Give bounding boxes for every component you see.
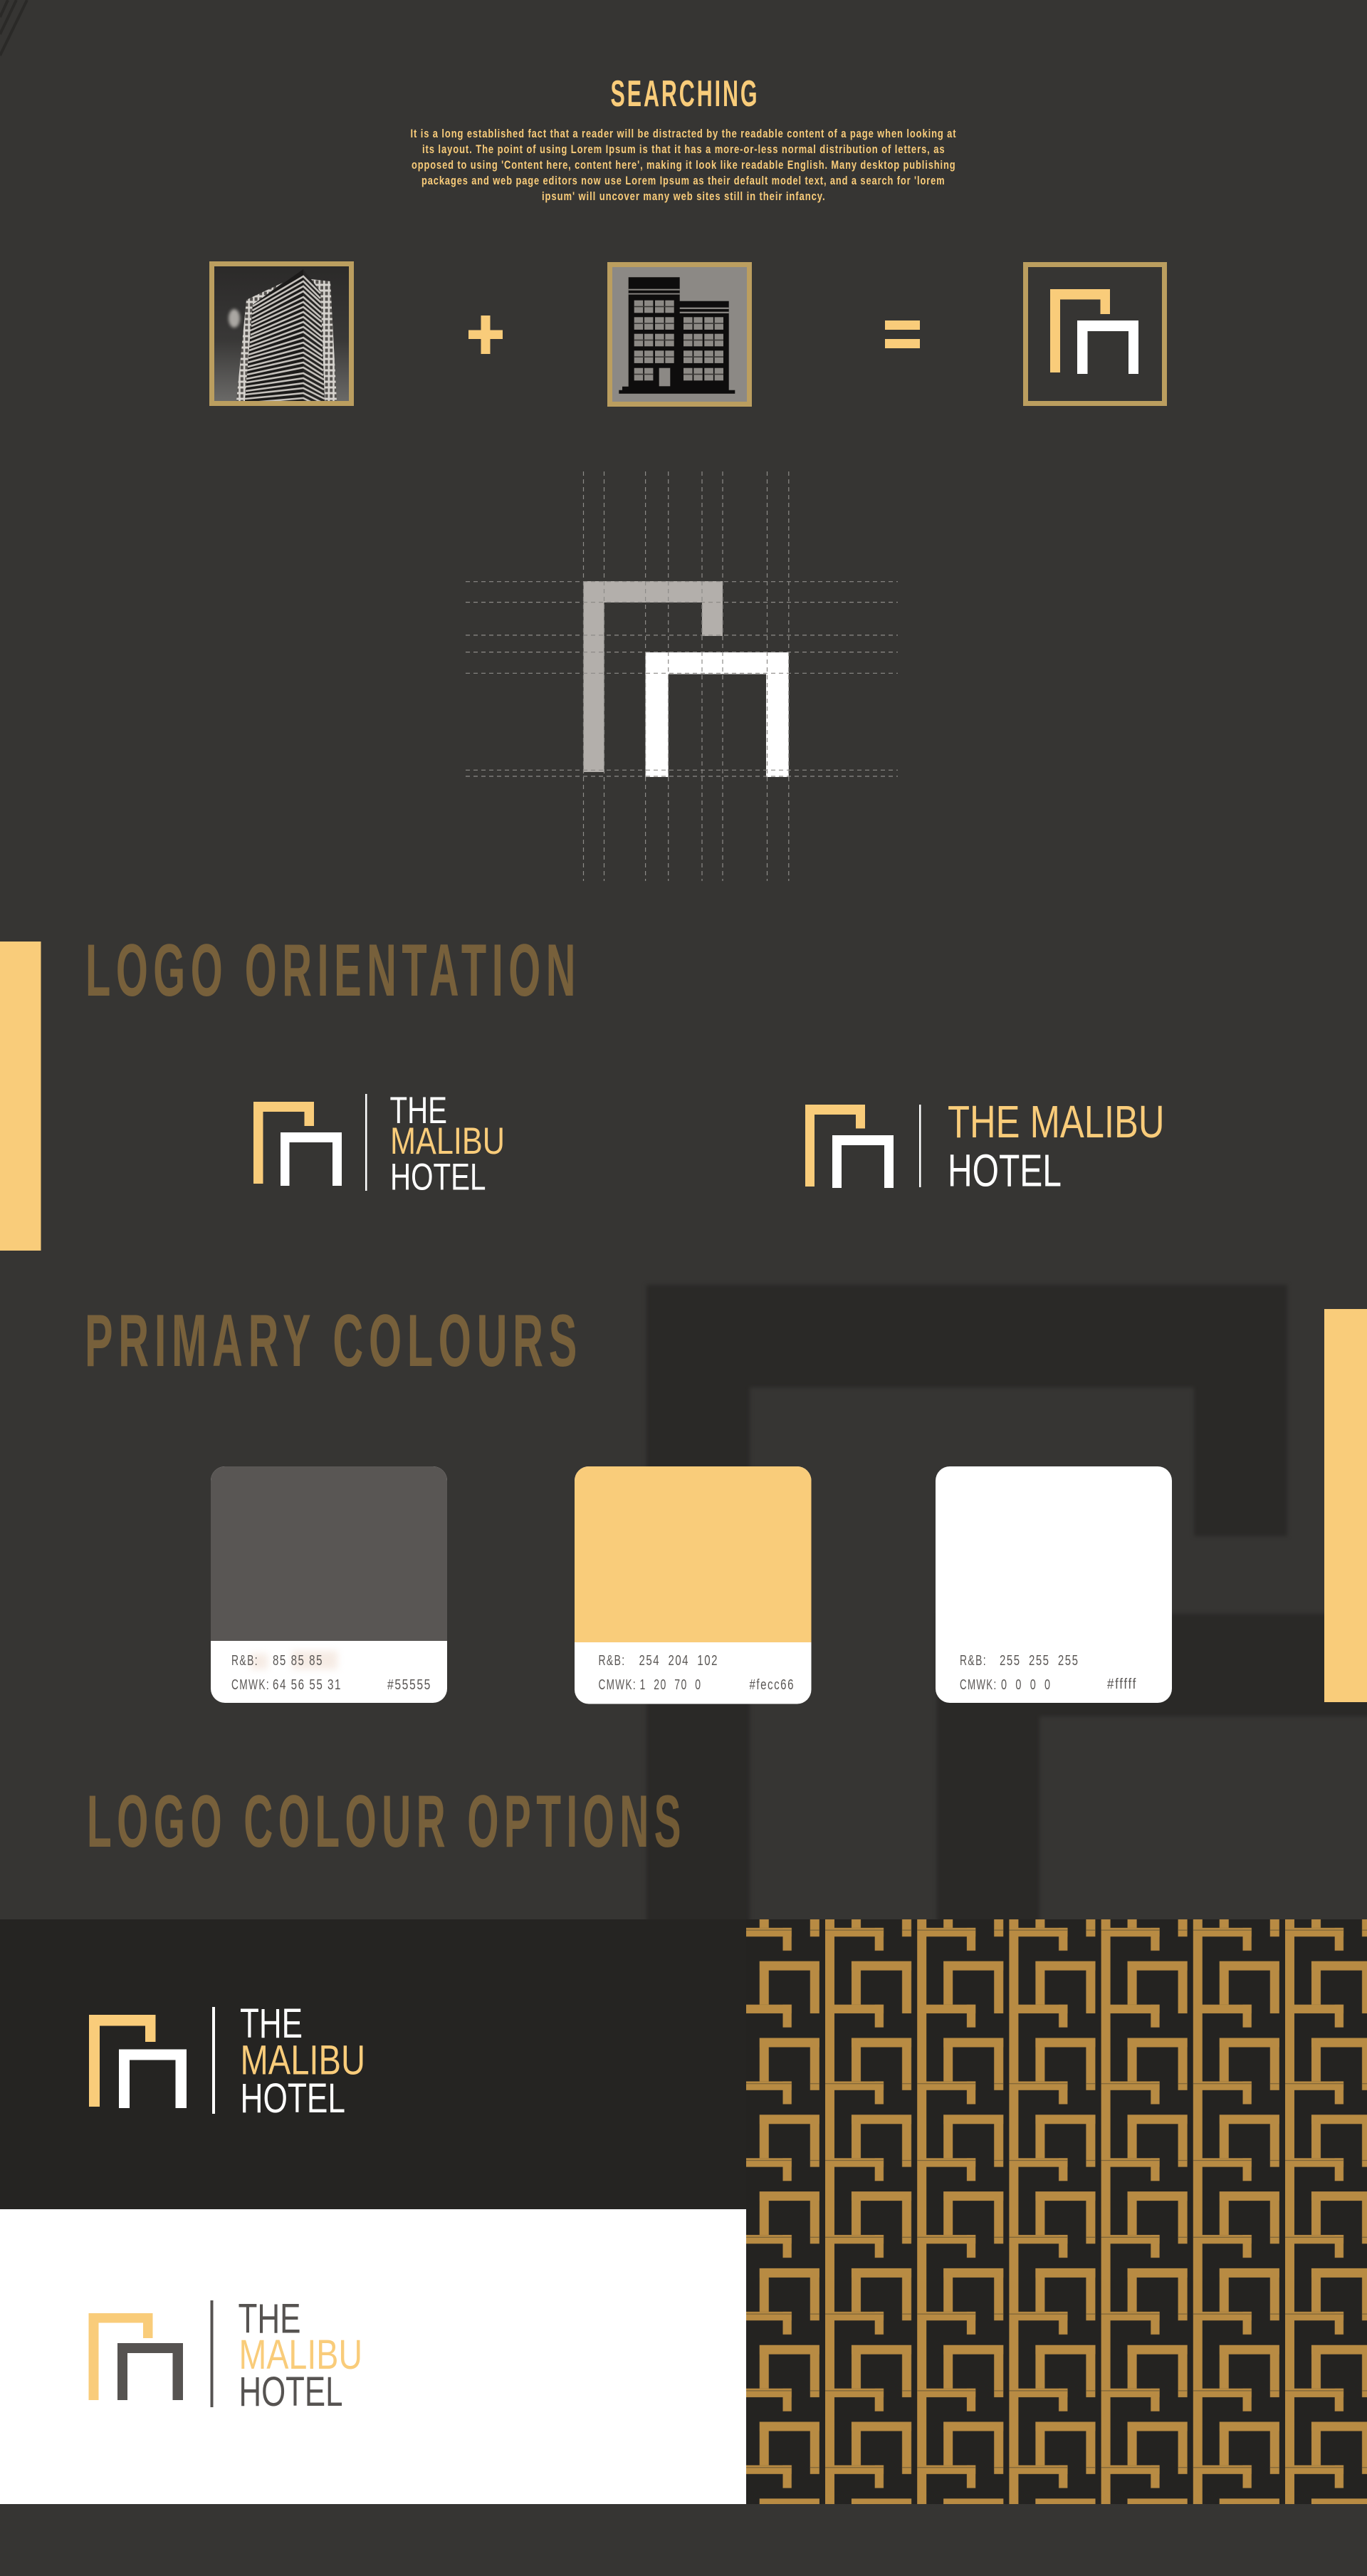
intro paragraph: its layout. The point of using Lorem Ipsum is that it has a more-or-less normal distribution of letters, as	[422, 142, 946, 156]
accent bar: left	[0, 942, 41, 1251]
panel: logo on dark: THE	[240, 2001, 303, 2047]
icon: plus sign	[468, 316, 503, 354]
panel: logo on white	[0, 2209, 746, 2504]
grey outer mark	[584, 581, 723, 772]
swatch card: gold: CMWK:	[598, 1677, 637, 1693]
swatch card: grey: 85 85 85	[273, 1652, 323, 1669]
logo mark in gold frame	[1025, 265, 1165, 403]
panel: brand pattern	[746, 1919, 1367, 2504]
accent bar: right	[1324, 1309, 1367, 1702]
logo: horizontal orientation: THE MALIBU	[948, 1096, 1165, 1147]
icon: building pictogram in gold frame	[609, 265, 749, 405]
icon: equals sign	[885, 320, 920, 348]
logo: stacked orientation: HOTEL	[390, 1157, 486, 1198]
building silhouette	[619, 277, 735, 394]
swatch card: white: CMWK:	[960, 1677, 997, 1693]
panel: logo on white: THE	[238, 2296, 300, 2342]
swatch card: white: #fffff	[1107, 1676, 1137, 1692]
swatch card: gold	[575, 1466, 812, 1704]
swatch card: white: 0 0 0 0	[1001, 1677, 1051, 1693]
swatch card: gold: 1 20 70 0	[639, 1677, 702, 1693]
intro paragraph: opposed to using 'Content here, content here', making it look like readable English. Many desktop publishing	[412, 158, 955, 172]
swatch card: grey: 64 56 55 31	[273, 1677, 342, 1693]
blurred smudge	[251, 1651, 337, 1669]
white inner mark	[645, 652, 789, 777]
frame	[609, 265, 749, 405]
logo: stacked orientation: MALIBU	[390, 1120, 505, 1162]
cloud	[229, 309, 240, 328]
intro paragraph	[410, 127, 957, 203]
swatch card: grey: R&B:	[231, 1652, 258, 1669]
heading: logo orientation: LOGO ORIENTATION	[85, 929, 581, 1012]
logo: stacked orientation	[253, 1090, 505, 1198]
tower side wings	[236, 279, 337, 401]
panel: logo on dark: HOTEL	[241, 2075, 345, 2122]
heading: searching: SEARCHING	[611, 73, 759, 115]
section: searching	[212, 73, 1165, 409]
swatch card: gold: #fecc66	[749, 1677, 795, 1693]
intro paragraph: ipsum' will uncover many web sites still in their infancy.	[542, 189, 826, 203]
panel: logo on white: HOTEL	[239, 2369, 343, 2415]
tower facade	[244, 269, 325, 409]
decorative corner lines	[0, 0, 27, 56]
tower	[236, 269, 337, 409]
panel: logo on dark: MALIBU	[241, 2037, 365, 2084]
swatch card: gold: 254 204 102	[639, 1652, 718, 1669]
panel: logo on white: MALIBU	[239, 2332, 362, 2378]
logo construction grid	[466, 471, 898, 881]
intro paragraph: It is a long established fact that a reader will be distracted by the readable content of a page when looking at	[410, 127, 957, 140]
panel: logo on dark	[0, 1919, 746, 2209]
logo: stacked orientation: THE	[390, 1090, 447, 1132]
image: skyscraper photo in gold frame	[212, 264, 352, 409]
door	[659, 368, 670, 386]
frame	[212, 264, 352, 403]
swatch card: gold: R&B:	[598, 1652, 625, 1669]
swatch card: grey: CMWK:	[231, 1677, 270, 1693]
swatch card: grey: #55555	[387, 1677, 431, 1693]
swatch card: white: 255 255 255	[1000, 1652, 1079, 1669]
logo: horizontal orientation: HOTEL	[948, 1145, 1062, 1196]
heading: primary colours: PRIMARY COLOURS	[85, 1300, 582, 1382]
heading: logo colour options: LOGO COLOUR OPTIONS	[87, 1780, 686, 1863]
windows	[634, 301, 723, 380]
swatch card: grey	[211, 1466, 447, 1703]
intro paragraph: packages and web page editors now use Lorem Ipsum as their default model text, and a search for 'lorem	[421, 174, 946, 187]
oversized background logo mark	[646, 1285, 1367, 1923]
swatch card: white: R&B:	[960, 1652, 987, 1669]
roof stripes	[629, 289, 729, 313]
logo: horizontal orientation	[805, 1096, 1165, 1196]
swatch card: white	[936, 1466, 1172, 1703]
